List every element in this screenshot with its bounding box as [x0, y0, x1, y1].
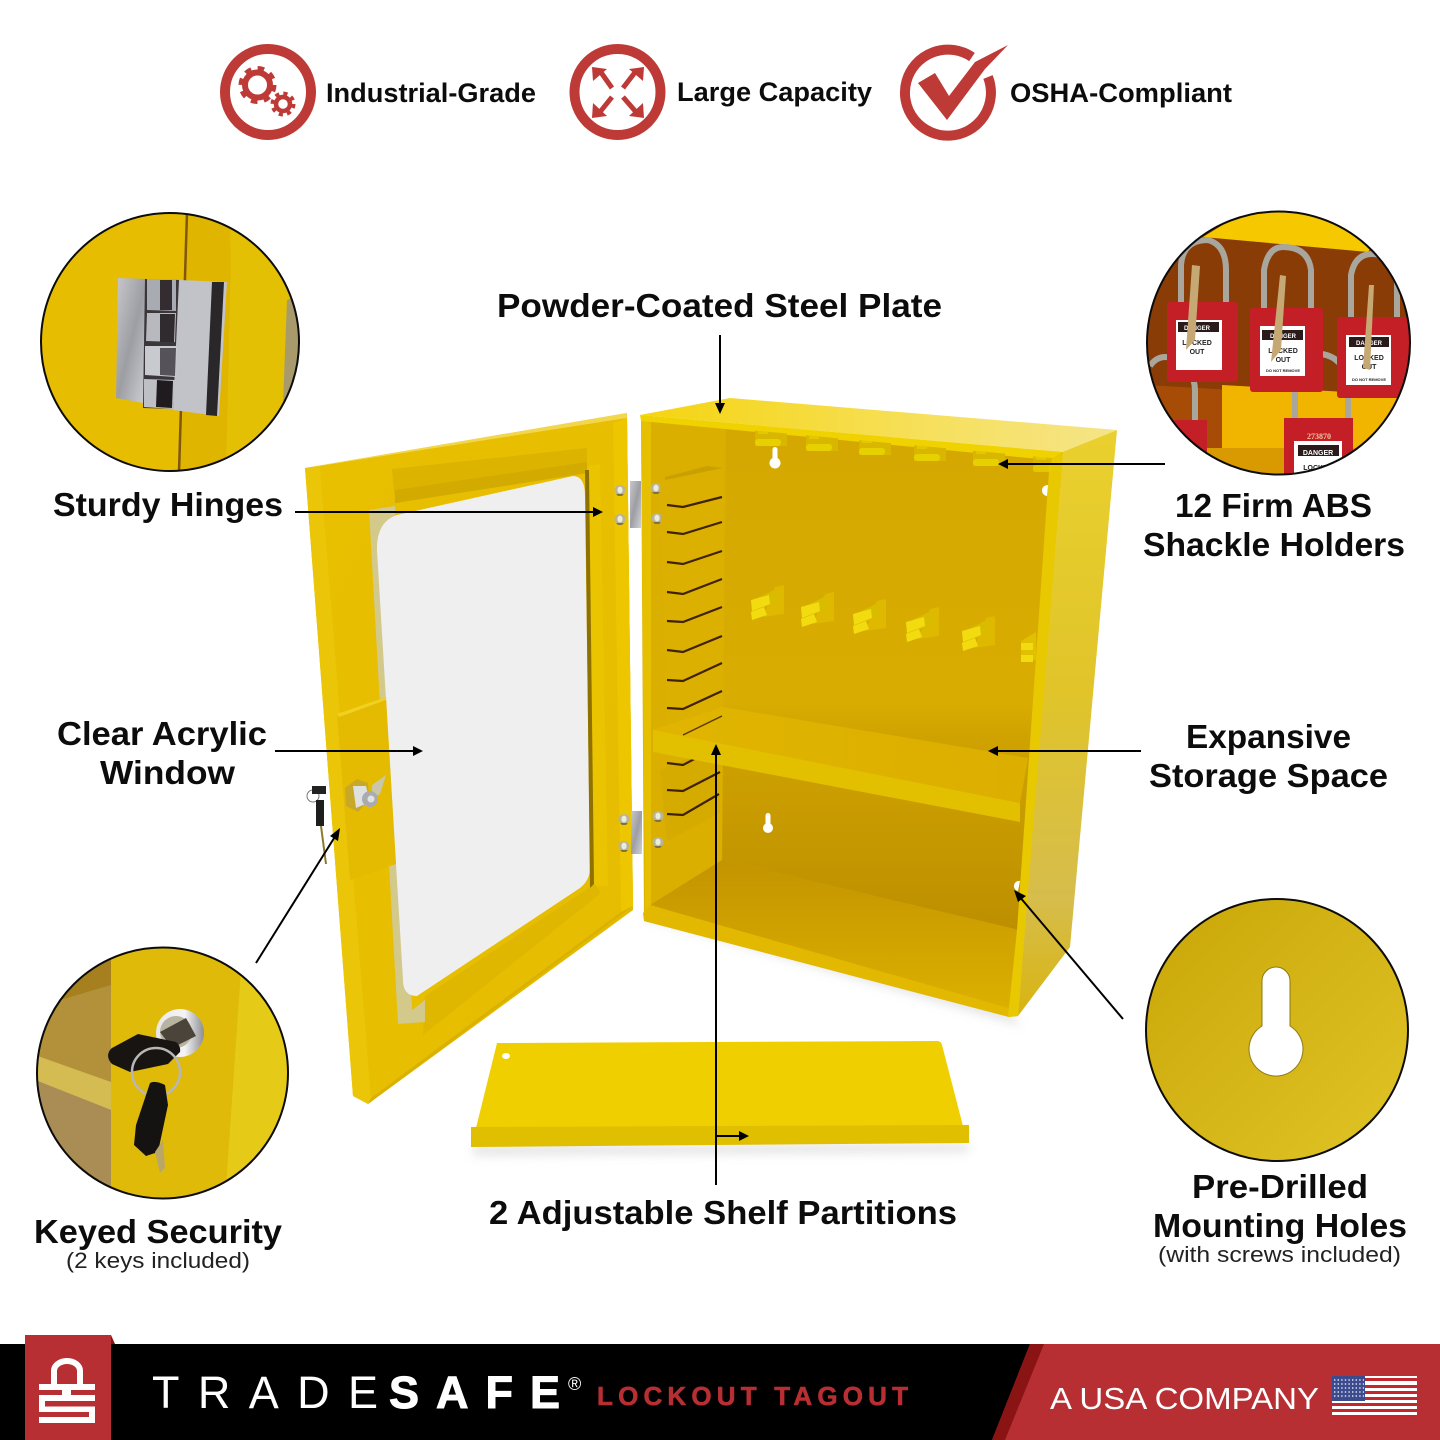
ring	[41, 213, 299, 471]
icon: gears	[225, 49, 311, 135]
label: Pre-Drilled Mounting Holes	[1153, 1168, 1407, 1267]
footer banner	[0, 1335, 1440, 1440]
label: Sturdy Hinges: Sturdy Hinges	[53, 486, 283, 523]
logo tab with padlock	[25, 1335, 115, 1440]
photo: open yellow lockout cabinet	[305, 398, 1117, 1155]
label: Keyed Security: Keyed Security	[34, 1213, 283, 1250]
lock cylinder	[156, 1009, 204, 1057]
label: Pre-Drilled Mounting Holes: Pre-Drilled	[1192, 1168, 1368, 1205]
installed shelf	[653, 707, 1028, 822]
key tag organizer	[660, 466, 723, 841]
callout: keyed security	[34, 828, 340, 1273]
circle photo: padlocks on holders: LOCKED	[1303, 465, 1333, 472]
circle photo: padlocks on holders: LOCKED	[1354, 355, 1384, 362]
circle photo: padlocks on holders: DANGER	[1356, 341, 1383, 347]
label: Keyed Security	[34, 1213, 283, 1273]
label: Window	[100, 754, 235, 791]
brand wordmark: ®	[568, 1374, 581, 1394]
arrow to storage space	[988, 746, 1141, 756]
ring	[37, 948, 288, 1198]
label	[1149, 718, 1388, 794]
label: Powder-Coated Steel Plate	[497, 287, 942, 324]
label: Industrial-Grade: Industrial-Grade	[326, 78, 536, 108]
icon: US flag	[1332, 1376, 1417, 1418]
callout: shackle holders	[998, 205, 1413, 563]
header feature: Industrial-Grade	[225, 49, 536, 135]
icon: expanding arrows	[574, 49, 660, 135]
circle photo: padlocks on holders: DANGER	[1184, 326, 1211, 332]
arrow to window	[275, 746, 423, 756]
top shackle holders	[755, 430, 1065, 472]
circle photo: padlocks on holders: 273870	[1307, 432, 1331, 441]
circle photo: padlocks on holders: DANGER	[1303, 450, 1333, 457]
cabinet screws	[650, 483, 664, 848]
key fobs	[108, 1034, 180, 1072]
door	[305, 413, 633, 1104]
circle photo: hinge	[38, 210, 303, 475]
circle photo: padlocks on holders: DO NOT REMOVE	[1352, 377, 1386, 382]
keys	[1186, 265, 1374, 370]
label: Lockout Tagout: LOCKOUT TAGOUT	[597, 1381, 908, 1411]
circle photo: padlocks on holders: LOCKED	[1182, 340, 1212, 347]
arrow to hinge	[295, 507, 603, 517]
header feature: Large Capacity	[574, 49, 872, 135]
circle photo: keyhole	[1146, 899, 1408, 1161]
key behind door	[307, 786, 327, 864]
circle photo: padlocks on holders: OUT	[1276, 357, 1291, 364]
label: 12 Firm ABS Shackle Holders	[1143, 487, 1405, 563]
cabinet body	[640, 398, 1117, 1017]
callout: powder-coated steel plate	[497, 287, 942, 414]
circle photo: padlocks on holders: LOCKED	[1268, 348, 1298, 355]
arrow to lock	[256, 828, 340, 963]
arrow to hole	[1014, 890, 1123, 1019]
circle photo: padlocks on holders: OUT	[1362, 364, 1377, 371]
label: 12 Firm ABS Shackle Holders: 12 Firm ABS	[1175, 487, 1372, 524]
arrow down to cabinet top	[715, 335, 725, 414]
arrow to holders	[998, 459, 1165, 469]
mounting keyholes	[763, 447, 1048, 891]
ring	[1147, 212, 1410, 474]
label: Keyed Security: (2 keys included)	[66, 1248, 250, 1273]
callout: sturdy hinges	[38, 210, 603, 523]
hinges	[614, 481, 642, 854]
callout: mounting holes	[1014, 890, 1408, 1267]
label: Storage Space	[1149, 757, 1388, 794]
label: 2 Adjustable Shelf Partitions	[489, 1194, 957, 1231]
cam lock	[345, 775, 386, 812]
label: Pre-Drilled Mounting Holes: Mounting Holes	[1153, 1207, 1407, 1244]
brand wordmark: SAFE	[389, 1367, 560, 1418]
brand wordmark: TRADE	[152, 1367, 378, 1418]
label: Pre-Drilled Mounting Holes: (with screws included)	[1158, 1242, 1401, 1267]
label: Expansive	[1186, 718, 1351, 755]
callout: clear acrylic window	[57, 715, 423, 791]
label: Clear Acrylic	[57, 715, 267, 752]
circle photo: padlocks on holders: DO NOT REMOVE	[1266, 368, 1300, 373]
header feature: OSHA-Compliant	[905, 45, 1232, 136]
circle photo: padlocks on holders: OUT	[1190, 349, 1205, 356]
label: A USA Company: A USA COMPANY	[1050, 1381, 1319, 1416]
label: Large Capacity: Large Capacity	[677, 77, 872, 107]
middle shackle holders	[751, 585, 1036, 662]
circle photo: padlocks on holders	[1145, 205, 1413, 481]
padlocks	[1150, 240, 1397, 425]
circle photo: padlocks on holders: DANGER	[1270, 334, 1297, 340]
label	[57, 715, 267, 791]
arrows to shelves	[711, 744, 749, 1185]
acrylic window	[377, 476, 590, 996]
shadows	[473, 910, 1020, 1155]
label: OSHA-Compliant: OSHA-Compliant	[1010, 78, 1232, 108]
callout: expansive storage space	[988, 718, 1388, 794]
label: 12 Firm ABS Shackle Holders: Shackle Holders	[1143, 526, 1405, 563]
callout: adjustable shelf partitions	[489, 744, 957, 1231]
circle photo: key in lock	[35, 946, 291, 1202]
icon: check mark	[905, 45, 1008, 136]
loose shelf partition	[471, 1041, 969, 1147]
brand wordmark	[152, 1367, 581, 1418]
